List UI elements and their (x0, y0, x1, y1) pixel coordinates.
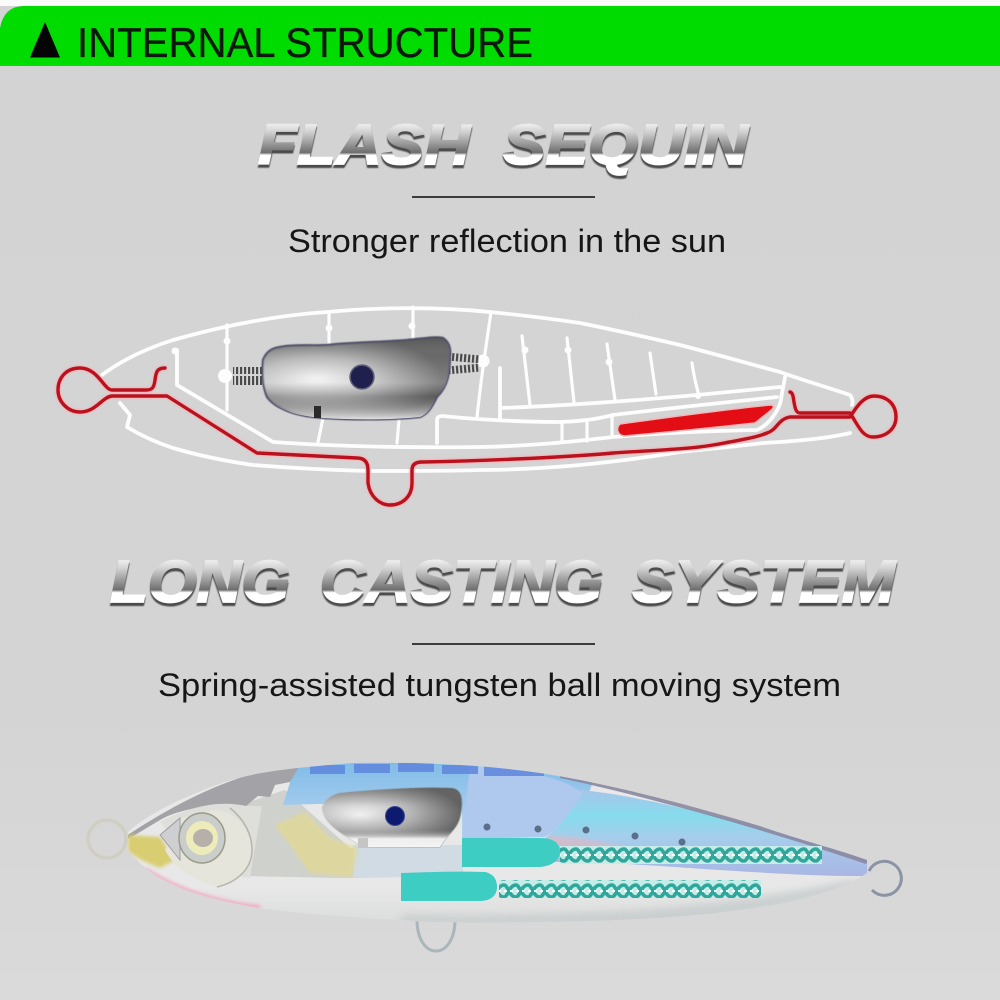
subtitle: long casting: Spring-assisted tungsten ball moving system (158, 667, 841, 703)
title: long casting system: LONG (110, 552, 290, 618)
header banner (0, 6, 1000, 66)
title: flash sequin: FLASH (258, 116, 472, 180)
front ring (88, 820, 126, 858)
title: flash sequin (258, 113, 750, 180)
belly shadow (400, 880, 870, 925)
title: long casting system: LONG (110, 549, 290, 615)
tungsten weight (322, 788, 462, 848)
yellow patches (128, 835, 175, 868)
body dots (484, 824, 686, 846)
back scale bars (310, 763, 544, 776)
pink belly line (145, 870, 260, 908)
icon: red flash sequin (618, 405, 773, 436)
transparent mid section (246, 790, 395, 878)
gill plate (165, 846, 238, 887)
heading: internal structure: INTERNAL STRUCTURE (77, 19, 533, 66)
teal spring sleeve upper (462, 838, 560, 867)
tail ring (869, 861, 901, 895)
title: long casting system: CASTING (320, 549, 603, 615)
subtitle: flash sequin: Stronger reflection in the sun (288, 223, 726, 259)
title: flash sequin: SEQUIN (503, 116, 750, 180)
icon: spring left (233, 367, 264, 385)
icon: spring right (449, 353, 479, 374)
divider: flash sequin (412, 196, 595, 198)
icon: tungsten ball (350, 365, 374, 389)
spring coil lower (499, 880, 761, 898)
diagram: lure cross-section (58, 307, 896, 505)
rib nodes (172, 322, 701, 399)
title: flash sequin: FLASH (258, 113, 472, 177)
title: long casting system: CASTING (320, 552, 603, 618)
icon: triangle (30, 22, 60, 58)
ribs (227, 307, 699, 443)
icon: eye (160, 813, 225, 863)
icon: tungsten weight (262, 337, 450, 419)
top blue back (283, 760, 600, 835)
divider: long casting (412, 643, 595, 645)
title: flash sequin: SEQUIN (503, 113, 750, 177)
title: long casting system: SYSTEM (632, 549, 897, 615)
red wire frame (58, 368, 896, 505)
illustration: transparent lure (88, 755, 901, 951)
grey head top (128, 768, 298, 838)
tail holographic stripe (545, 790, 870, 876)
lure body (128, 762, 867, 922)
lure outline (102, 308, 853, 471)
lower transparent box (353, 845, 463, 877)
belly hook (417, 920, 455, 951)
head transparent zone (160, 804, 262, 878)
dark top line (560, 770, 870, 864)
tungsten ball (386, 806, 404, 826)
title: long casting system (110, 549, 897, 618)
spring coil upper (560, 846, 822, 864)
teal spring sleeve lower (401, 872, 497, 901)
title: long casting system: SYSTEM (632, 552, 897, 618)
